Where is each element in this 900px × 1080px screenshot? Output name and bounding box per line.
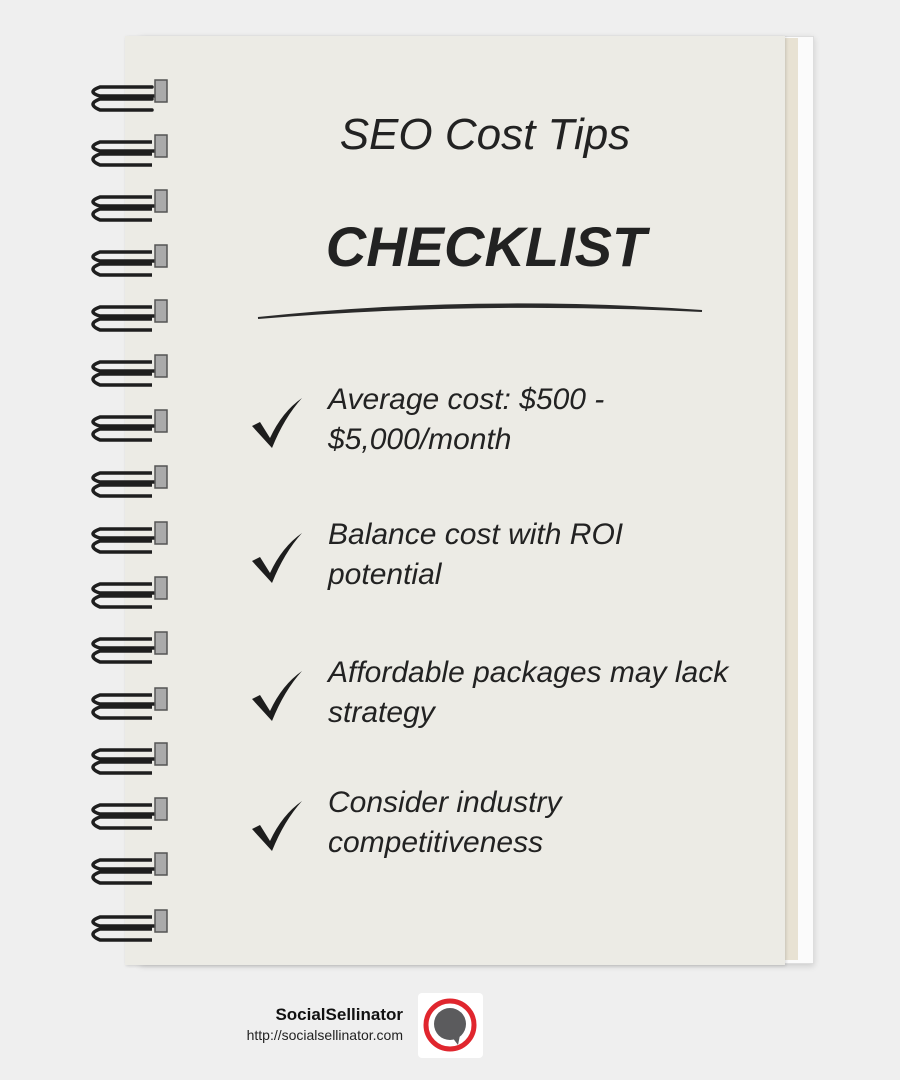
checklist [252, 383, 730, 859]
title: CHECKLIST [326, 215, 646, 278]
item 2: Balance cost with ROI potential [328, 518, 623, 591]
logo [418, 993, 483, 1058]
underline [258, 303, 702, 319]
item 3: Affordable packages may lack strategy [328, 656, 728, 729]
footer brand text: SocialSellinator [275, 1005, 403, 1024]
footer brand text [247, 1005, 403, 1043]
notebook back pages [140, 36, 814, 964]
footer brand text: http://socialsellinator.com [247, 1027, 403, 1043]
notebook page [125, 36, 785, 965]
item 1: Average cost: $500 - $5,000/month [328, 383, 604, 456]
item 4: Consider industry competitiveness [328, 786, 561, 859]
subtitle: SEO Cost Tips [340, 110, 630, 159]
spiral binding [91, 79, 168, 942]
